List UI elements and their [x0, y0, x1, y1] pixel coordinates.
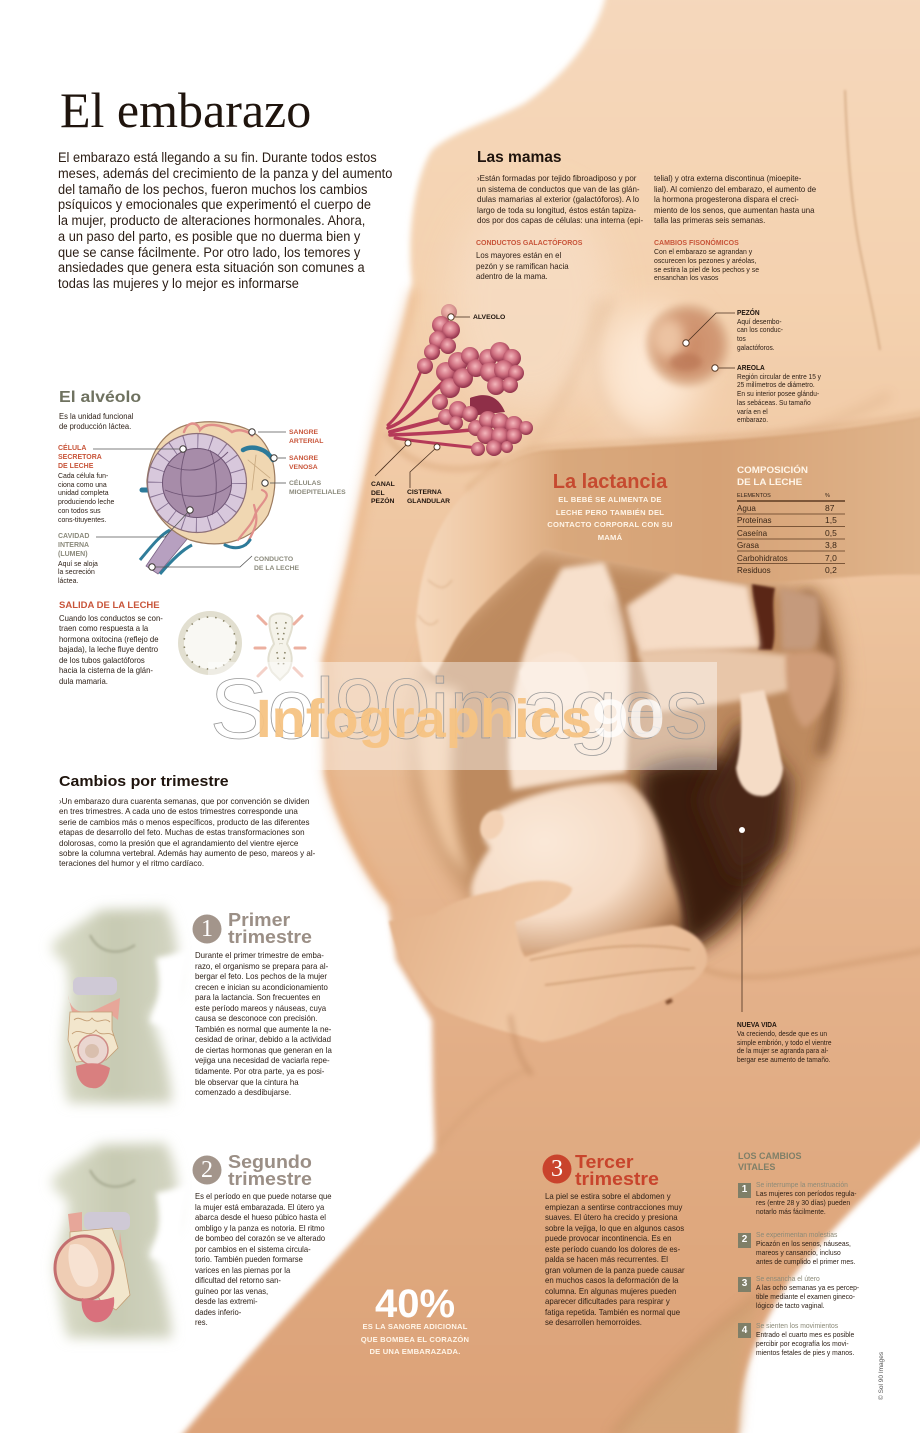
element values: 1,5: [825, 515, 837, 525]
callout: nueva vida: Va creciendo, desde que es un: [737, 1029, 827, 1038]
element names: Proteínas: [737, 515, 772, 525]
text: primer trimestre: razo, el organismo se prepara para al-: [195, 961, 328, 971]
alveolar lobules: [417, 304, 533, 456]
label: sangre venosa: [289, 455, 318, 471]
callout: areola: En su interior posee glándu-: [737, 389, 819, 398]
text 3: [756, 1274, 859, 1310]
text 1: Se interrumpe la menstruación: [756, 1180, 848, 1189]
callout: célula secretora: SECRETORA: [58, 454, 102, 461]
callout: areola: Región circular de entre 15 y: [737, 372, 821, 381]
text 1: Las mujeres con períodos regula-: [756, 1189, 857, 1198]
lumen grid: [165, 450, 231, 516]
text: cambios por trimestre: teraciones del humor y el ritmo cardíaco.: [59, 858, 204, 868]
number 1: 1: [201, 916, 213, 942]
number 4 box label: 4: [742, 1325, 747, 1336]
element names: [737, 503, 788, 575]
text: 40% caption: ES LA SANGRE ADICIONAL: [362, 1322, 468, 1331]
element values: 87: [825, 503, 834, 513]
text: 40% caption: DE UNA EMBARAZADA.: [369, 1347, 461, 1356]
label: canal del pezón: [371, 481, 395, 505]
callout: areola: embarazo.: [737, 415, 768, 424]
text: primer trimestre: comenzado a desdibujarse.: [195, 1087, 291, 1097]
text 3: A las ocho semanas ya es percep-: [756, 1283, 859, 1292]
label: conductos galactóforos: CONDUCTOS GALACTÓFOROS: [476, 240, 582, 247]
label: conducto de la leche: [254, 556, 299, 572]
text: salida: bajada), la leche fluye dentro: [59, 644, 158, 654]
text: segundo trimestre: dades inferio-: [195, 1306, 241, 1316]
label: sangre arterial: SANGRE: [289, 429, 318, 436]
text 2: [756, 1230, 855, 1266]
intro text: la mujer, producto de alteraciones hormonales. Ahora,: [58, 213, 365, 228]
label: canal del pezón: CANAL: [371, 481, 395, 488]
second leg shadow: [612, 1295, 760, 1433]
text: primer trimestre: bergar el feto. Los pechos de la mujer: [195, 971, 327, 981]
heading: segundo trimestre: trimestre: [228, 1168, 312, 1189]
text: primer trimestre: tidamente. Por otra parte, ya es posi-: [195, 1066, 324, 1076]
element names: Agua: [737, 503, 756, 513]
text: mamas column 1: largo de toda su longitud, éstos están tapiza-: [477, 204, 636, 214]
callout: nueva vida: simple embrión, y todo el vientre: [737, 1038, 832, 1047]
callout: cavidad interna: láctea.: [58, 576, 78, 585]
shoulder and chest shading: [450, 90, 880, 410]
heading: cambios por trimestre: Cambios por trimestre: [59, 773, 229, 790]
text 3: lógico de tacto vaginal.: [756, 1301, 825, 1310]
callout: cavidad interna: (LUMEN): [58, 551, 88, 558]
text: lactancia: MAMÁ: [598, 533, 622, 542]
text 4: percibir por ecografía los movi-: [756, 1339, 849, 1348]
callout: célula secretora: [58, 444, 114, 524]
text 4: Se sienten los movimientos: [756, 1321, 838, 1330]
callout: cavidad interna: Aquí se aloja: [58, 559, 98, 568]
text: cambios por trimestre: dolorosas, como la presión que el agrandamiento del vientre ejerce: [59, 838, 298, 848]
text: segundo trimestre: desde las extremi-: [195, 1296, 258, 1306]
text: segundo trimestre: Es el período en que puede notarse que: [195, 1191, 332, 1201]
lower hand: [389, 881, 707, 1042]
text: mamas column 2: [654, 173, 816, 225]
text: tercer trimestre: columna. En algunas mujeres pueden: [545, 1286, 676, 1296]
label: sangre venosa: SANGRE: [289, 455, 318, 462]
element names: Residuos: [737, 565, 771, 575]
callout: pezón: [737, 308, 783, 352]
table percent header: %: [825, 493, 830, 499]
text: tercer trimestre: gran volumen de la panza puede causar: [545, 1264, 685, 1274]
text: lactancia: LECHE PERO TAMBIÉN DEL: [556, 508, 664, 517]
element names: Carbohidratos: [737, 553, 788, 563]
callout: areola: 25 milímetros de diámetro.: [737, 380, 815, 389]
element names: Grasa: [737, 540, 759, 550]
alveolus diagram: [93, 422, 286, 574]
text: tercer trimestre: suaves. El útero ha crecido y presiona: [545, 1212, 678, 1222]
heading: los cambios vitales: VITALES: [738, 1162, 775, 1172]
text: salida: traen como respuesta a la: [59, 623, 148, 633]
heading: primer trimestre: trimestre: [228, 926, 312, 947]
label: cambios fisonómicos: CAMBIOS FISONÓMICOS: [654, 240, 739, 247]
callout: areola: AREOLA: [737, 363, 765, 372]
table: composición de la leche: [737, 464, 837, 575]
text: segundo trimestre: dificultad del retorno san-: [195, 1275, 281, 1285]
label: sangre arterial: [289, 429, 324, 445]
stat: 40%: 40%: [375, 1282, 455, 1326]
title: El embarazo: [60, 82, 311, 138]
text: mamas column 2: talla las primeras seis semanas.: [654, 215, 765, 225]
intro text: ansiedades que genera esta situación son comunes a: [58, 260, 365, 275]
callout: cavidad interna: INTERNA: [58, 542, 89, 549]
text: cambios: [654, 247, 759, 282]
element names: Caseína: [737, 528, 767, 538]
organs: [84, 1212, 130, 1230]
intro text: del tamaño de los pechos, fueron muchos los cambios: [58, 182, 367, 196]
outer tissue: [147, 422, 275, 544]
watermark text outline: Sol90images: [210, 662, 708, 757]
text: segundo trimestre: varices en las piernas por la: [195, 1264, 290, 1274]
callout: nueva vida: bergar ese aumento de tamaño.: [737, 1055, 830, 1064]
text: primer trimestre: vejiga una necesidad de vaciarla repe-: [195, 1055, 330, 1065]
text: lactancia: EL BEBÉ SE ALIMENTA DE: [558, 495, 662, 504]
baby ear: [476, 807, 508, 843]
callout dots: [149, 429, 277, 570]
label: sangre arterial: ARTERIAL: [289, 438, 323, 445]
pressure arrows: [255, 616, 305, 676]
baby lower leg and foot: [736, 690, 783, 796]
text: alvéolo intro: de producción láctea.: [59, 422, 131, 431]
text: conductos: pezón y se ramifican hacia: [476, 260, 569, 270]
element values: [825, 503, 837, 575]
upper arm and hand: [416, 415, 920, 676]
text: segundo trimestre: por cambios en el sistema circula-: [195, 1244, 311, 1254]
text: segundo trimestre: la mujer está embarazada. El útero ya: [195, 1202, 324, 1212]
bladder and uterus: [82, 1297, 114, 1322]
number 3: 3: [551, 1156, 563, 1182]
intro text: a un paso del parto, es posible que no duerma bien y: [58, 229, 360, 244]
text: mamas column 1: dos por dos capas de células: una interna (epi-: [477, 215, 643, 225]
text: primer trimestre: También es normal que aumente la ne-: [195, 1024, 331, 1034]
table title: COMPOSICIÓN: [737, 465, 808, 475]
text 4: [756, 1321, 854, 1357]
baby leg horizontal: [638, 649, 790, 712]
text: tercer trimestre: este período cuando los dolores de es-: [545, 1244, 680, 1254]
callout: pezón: can los conduc-: [737, 325, 783, 334]
right breast: [525, 300, 890, 452]
text: cambios: se estira la piel de los pechos y se: [654, 265, 759, 274]
callout: nueva vida: NUEVA VIDA: [737, 1020, 777, 1029]
callout: cavidad interna: CAVIDAD: [58, 533, 89, 540]
callout: pezón: galactóforos.: [737, 343, 775, 352]
label: canal del pezón: DEL: [371, 490, 385, 497]
text: cambios: ensanchan los vasos: [654, 273, 718, 282]
callout lines: [93, 432, 286, 567]
intro text: El embarazo está llegando a su fin. Durante todos estos: [58, 150, 377, 165]
callout: areola: varía en el: [737, 407, 768, 416]
text: mamas column 1: un sistema de conductos que van de las glán-: [477, 184, 640, 194]
callout: célula secretora: con todos sus: [58, 506, 101, 515]
intro text: todas las mujeres y lo mejor es informarse: [58, 276, 299, 291]
label: conducto de la leche: DE LA LECHE: [254, 565, 299, 572]
callout: cavidad interna: la secreción: [58, 567, 95, 576]
baby foot right: [786, 652, 836, 728]
text: tercer trimestre: aparecer dificultades para respirar y: [545, 1296, 670, 1306]
torso: first trimester: [52, 908, 190, 1103]
text: primer trimestre: cesidad de orinar, debido a la actividad: [195, 1034, 331, 1044]
heading: tercer trimestre: Tercer: [575, 1151, 634, 1172]
text 2: antes de cumplido el primer mes.: [756, 1257, 855, 1266]
text: mamas column 1: dulas mamarias al exterior (galactóforos). A lo: [477, 194, 639, 204]
element values: 0,2: [825, 565, 837, 575]
heading: La lactancia: La lactancia: [553, 471, 667, 493]
text: mamas column 2: telial) y otra externa discontinua (mioepite-: [654, 173, 801, 183]
callout: célula secretora: cons-tituyentes.: [58, 515, 106, 524]
label: canal del pezón: PEZÓN: [371, 498, 394, 505]
element values: 7,0: [825, 553, 837, 563]
bladder and uterus: [76, 1063, 110, 1088]
baby thigh: [509, 562, 630, 790]
table title: DE LA LECHE: [737, 477, 802, 487]
text 2: mareos y cansancio, incluso: [756, 1248, 841, 1257]
text 2: Se experimentan molestias: [756, 1230, 837, 1239]
callout: areola: [737, 363, 821, 424]
text 1: [756, 1180, 857, 1216]
heading: segundo trimestre: [228, 1151, 312, 1189]
text: cambios: oscurecen los pezones y aréolas,: [654, 256, 756, 265]
text: tercer trimestre: empiezan a sentirse contracciones muy: [545, 1202, 682, 1212]
groin crease: [510, 1015, 532, 1075]
baby head: [471, 782, 681, 953]
text: segundo trimestre: [195, 1191, 332, 1327]
callout: célula secretora: DE LECHE: [58, 463, 93, 470]
organs: [73, 977, 117, 995]
text: tercer trimestre: en muchos casos la deformación de la: [545, 1275, 678, 1285]
callout: célula secretora: unidad completa: [58, 488, 109, 497]
label: cisterna glandular: [407, 489, 450, 505]
vital change 1: [742, 1180, 857, 1216]
contracted duct: [268, 614, 292, 680]
heading: El alvéolo: El alvéolo: [59, 389, 141, 406]
torso: second trimester: [52, 1143, 190, 1338]
text 3: tible mediante el examen gineco-: [756, 1292, 855, 1301]
text: mamas column 1: [477, 173, 643, 225]
credit: © Sol 90 Images: [878, 1352, 885, 1400]
translucent watermark band: [208, 662, 717, 770]
text: conductos: [476, 250, 569, 281]
text: primer trimestre: Durante el primer trimestre de emba-: [195, 950, 324, 960]
watermark text infographics: Infographics: [256, 689, 592, 749]
callout: cavidad interna: [58, 533, 98, 585]
number 3 box label: 3: [742, 1278, 747, 1289]
womb shadow: [415, 550, 843, 955]
callout: nueva vida: de la mujer se agranda para al-: [737, 1046, 828, 1055]
text: mamas column 2: la hormona progesterona dispara el creci-: [654, 194, 799, 204]
text: segundo trimestre: res.: [195, 1317, 208, 1327]
text: tercer trimestre: se desarrollen hemorroides.: [545, 1317, 642, 1327]
text: primer trimestre: causa se desconoce con precisión.: [195, 1013, 317, 1023]
text 1: res (entre 28 y 30 días) pueden: [756, 1198, 850, 1207]
milk ducts: [388, 362, 490, 448]
text: primer trimestre: crecen e inician su acondicionamiento: [195, 982, 328, 992]
text: lactancia: [547, 495, 673, 542]
left edge warm rim: [327, 290, 414, 905]
callout: pezón: PEZÓN: [737, 308, 760, 317]
breast callouts: [375, 313, 742, 1012]
text: mamas column 2: lial). Al comienzo del embarazo, el aumento de: [654, 184, 816, 194]
heading: salida de la leche: SALIDA DE LA LECHE: [59, 600, 160, 611]
table rows: ELEMENTOS: [737, 493, 771, 499]
heading: primer trimestre: [228, 909, 312, 947]
text: cambios por trimestre: etapas de desarrollo del feto. Muchas de estas transformaciones son: [59, 827, 305, 837]
text: salida: [59, 613, 163, 686]
text 4: mientos fetales de pies y manos.: [756, 1348, 854, 1357]
text: primer trimestre: este período mareos y náuseas, cuya: [195, 1003, 326, 1013]
text: tercer trimestre: palda se hacen más recurrentes. El: [545, 1254, 668, 1264]
text: tercer trimestre: fatiga repetida. También es normal que: [545, 1306, 680, 1316]
callout: pezón: Aquí desembo-: [737, 317, 782, 326]
vital change 2: [742, 1230, 855, 1266]
label: alveolo: ALVEOLO: [473, 314, 505, 321]
text: primer trimestre: [195, 950, 332, 1097]
trimester number circles: [192, 914, 572, 1184]
heading: tercer trimestre: [575, 1151, 659, 1189]
heading: tercer trimestre: trimestre: [575, 1168, 659, 1189]
vital change 4: [742, 1321, 854, 1357]
fetus in uterus: [55, 1236, 113, 1300]
belly crease: [702, 950, 920, 977]
womb window with baby: [415, 550, 843, 955]
text: tercer trimestre: puede provocar incontinencia. Es en: [545, 1233, 672, 1243]
text: cambios por trimestre: sobre la columna vertebral. Además hay aumento de peso, mareos y al-: [59, 848, 315, 858]
label: conducto de la leche: CONDUCTO: [254, 556, 293, 563]
milk ejection diagrams: [181, 614, 305, 680]
intro text: que se canse fácilmente. Por otro lado, los temores y: [58, 244, 360, 260]
table title: [737, 464, 808, 487]
baby hand: [520, 652, 589, 708]
text: 40% caption: QUE BOMBEA EL CORAZÓN: [361, 1335, 469, 1344]
text: mamas column 1: ›Están formadas por tejido fibroadiposo y por: [477, 173, 636, 183]
text: segundo trimestre: torio. También pueden formarse: [195, 1254, 303, 1264]
umbilical cord and placenta: [780, 588, 820, 650]
text: cambios por trimestre: [59, 796, 315, 868]
left breast with mammary glands: [386, 304, 533, 469]
watermark text 90: 90: [592, 689, 665, 749]
text: cambios por trimestre: en tres trimestres. A cada uno de estos trimestres corresponde una: [59, 806, 298, 816]
intro text: psíquicos y emocionales que experimentó el cuerpo de: [58, 197, 371, 212]
text: lactancia: CONTACTO CORPORAL CON SU: [547, 520, 673, 529]
callout: nueva vida: [737, 1020, 832, 1064]
text: alvéolo intro: Es la unidad funcional: [59, 412, 133, 421]
label: cisterna glandular: GLANDULAR: [407, 498, 450, 505]
text: tercer trimestre: sobre la vejiga, lo que en algunos casos: [545, 1222, 684, 1232]
baby torso: [626, 573, 760, 655]
duct: [146, 528, 188, 574]
text 2: Picazón en los senos, náuseas,: [756, 1239, 851, 1248]
callout: célula secretora: ciona como una: [58, 480, 107, 489]
light band along womb: [415, 680, 470, 880]
callout: célula secretora: produciendo leche: [58, 497, 114, 506]
heading: los cambios vitales: LOS CAMBIOS: [738, 1151, 802, 1161]
text: tercer trimestre: [545, 1191, 685, 1327]
label: células mioepiteliales: CÉLULAS: [289, 480, 321, 487]
text: segundo trimestre: ombligo y la panza es notoria. El ritmo: [195, 1222, 325, 1232]
blood vessels: [142, 424, 273, 548]
text: salida: dula mamaria.: [59, 676, 108, 686]
text: primer trimestre: de ciertas hormonas que generan en la: [195, 1045, 332, 1055]
text: salida: Cuando los conductos se con-: [59, 613, 163, 623]
intro text: meses, además del crecimiento de la panza y del aumento: [58, 166, 392, 181]
embryo: [78, 1035, 108, 1065]
text: primer trimestre: para la lactancia. Son frecuentes en: [195, 992, 320, 1002]
label: sangre venosa: VENOSA: [289, 464, 318, 471]
label: cisterna glandular: CISTERNA: [407, 489, 442, 496]
text: conductos: Los mayores están en el: [476, 250, 561, 260]
text: salida: de los tubos galactóforos: [59, 655, 145, 665]
element values: 0,5: [825, 528, 837, 538]
callout: pezón: tos: [737, 334, 746, 343]
number 2: 2: [201, 1157, 213, 1183]
element values: 3,8: [825, 540, 837, 550]
text 4: Entrado el cuarto mes es posible: [756, 1330, 854, 1339]
intro text: [58, 150, 392, 291]
text: cambios por trimestre: ›Un embarazo dura cuarenta semanas, que por convención se dividen: [59, 796, 309, 806]
callout dots: [405, 314, 745, 833]
heading: Las mamas: Las mamas: [477, 149, 562, 166]
number 1 box label: 1: [742, 1184, 747, 1195]
vital change number boxes: [738, 1183, 751, 1338]
callout: areola: las sebáceas. Su tamaño: [737, 398, 811, 407]
text: alvéolo intro: [59, 412, 133, 431]
text: 40% caption: [361, 1322, 469, 1356]
text 3: Se ensancha el útero: [756, 1274, 820, 1283]
text 1: notarlo más fácilmente.: [756, 1207, 826, 1216]
text: tercer trimestre: La piel se estira sobre el abdomen y: [545, 1191, 671, 1201]
text: primer trimestre: ble observar que la cintura ha: [195, 1077, 299, 1087]
text: segundo trimestre: abarca desde el hueso púbico hasta el: [195, 1212, 326, 1222]
heading: primer trimestre: Primer: [228, 909, 290, 930]
areola: [643, 300, 733, 390]
number 2 box label: 2: [742, 1234, 747, 1245]
heading: segundo trimestre: Segundo: [228, 1151, 312, 1172]
open duct ring: [181, 614, 239, 672]
vital change 3: [742, 1274, 859, 1310]
text: cambios por trimestre: serie de cambios más o menos específicos, producto de las diferentes: [59, 817, 309, 827]
callout: célula secretora: CÉLULA: [58, 445, 86, 452]
callout: célula secretora: Cada célula fun-: [58, 471, 108, 480]
label: células mioepiteliales: MIOEPITELIALES: [289, 489, 346, 496]
text: mamas column 2: miento de los senos, que aumentan hasta una: [654, 204, 814, 214]
text: salida: hormona oxitocina (reflejo de: [59, 634, 159, 644]
milk table rules: [737, 501, 845, 564]
text: cambios: Con el embarazo se agrandan y: [654, 247, 752, 256]
text: salida: hacia la cisterna de la glán-: [59, 665, 153, 675]
text: conductos: adentro de la mama.: [476, 271, 548, 281]
secretory cells ring: [155, 441, 239, 525]
label: células mioepiteliales: [289, 479, 346, 496]
text: segundo trimestre: guíneo por las venas,: [195, 1286, 268, 1296]
heading: los cambios vitales: [738, 1151, 802, 1172]
text: segundo trimestre: de bombeo del corazón se ve alterado: [195, 1233, 325, 1243]
